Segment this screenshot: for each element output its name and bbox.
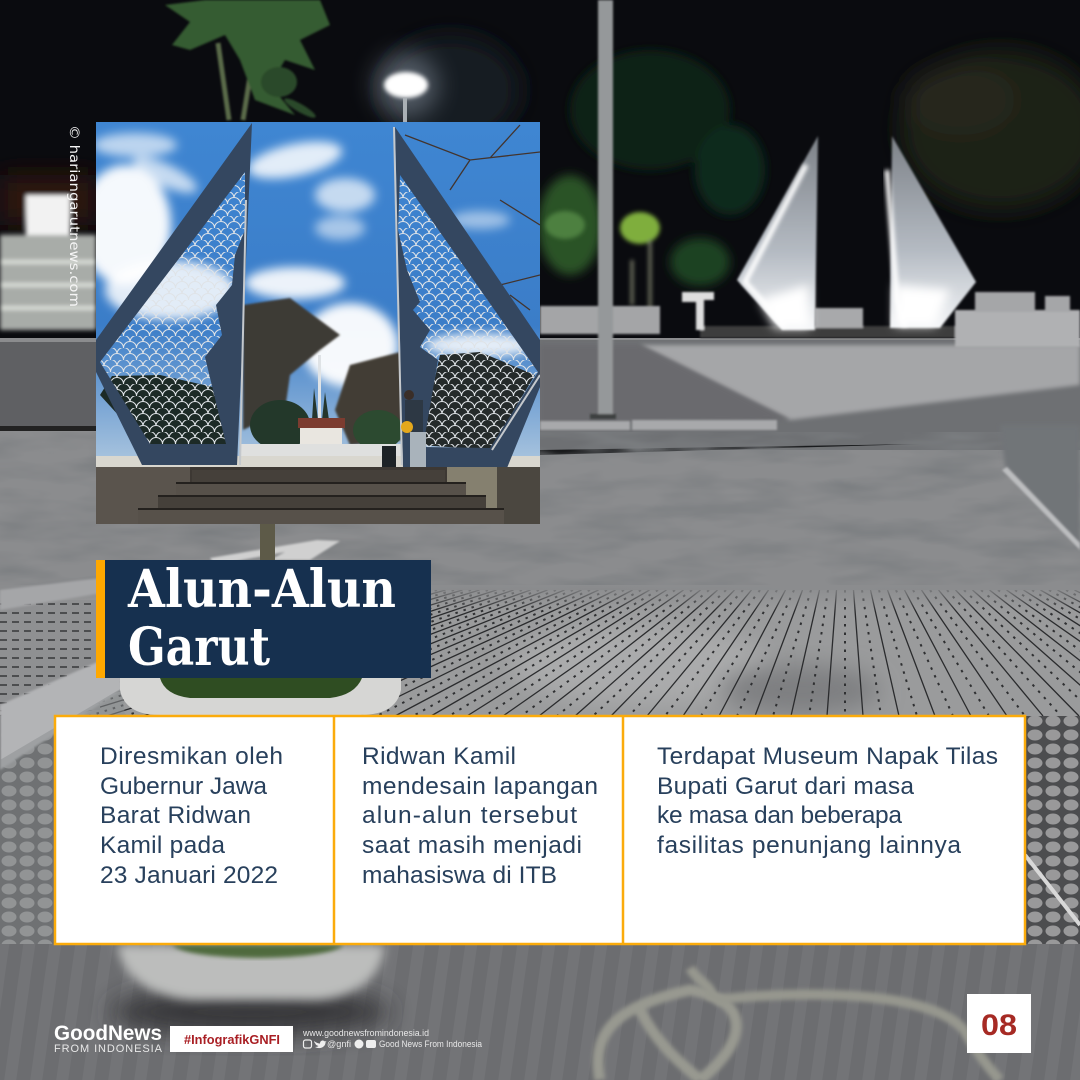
column 3 text: Bupati Garut dari masa	[657, 773, 914, 800]
footer contact details: Good News From Indonesia	[379, 1039, 482, 1049]
column 1 text: Barat Ridwan	[100, 802, 251, 829]
dotted joints in perspective	[0, 590, 1080, 716]
lamp glow	[374, 53, 438, 124]
sky	[96, 122, 540, 462]
silver edges of the frames	[240, 127, 540, 465]
column 1 text: Diresmikan oleh	[100, 743, 283, 770]
blurred bottom strip	[0, 944, 1080, 1080]
trees behind the right mesh	[420, 352, 535, 450]
post under the photo	[260, 524, 275, 564]
clouds	[79, 133, 535, 387]
hashtag badge: #InfografikGNFI	[184, 1032, 280, 1047]
monument sails	[737, 136, 976, 330]
title text: Garut	[128, 617, 270, 678]
hashtag badge	[170, 1026, 293, 1052]
steps and stone base	[96, 467, 540, 524]
street pole	[590, 0, 616, 419]
trees behind the left mesh	[100, 375, 226, 450]
photo credit: © hariangarutnews.com	[66, 125, 82, 307]
plaza ground	[0, 338, 1080, 598]
tree at the top left	[165, 0, 330, 120]
left mesh	[100, 172, 245, 444]
left paving and curb	[0, 578, 125, 945]
icon: instagram	[304, 1040, 312, 1048]
dark trees on the right	[900, 50, 1080, 210]
footer logo	[54, 1022, 163, 1055]
footer logo: FROM INDONESIA	[54, 1043, 163, 1055]
mottled paving texture	[0, 432, 1080, 602]
white cable	[1025, 855, 1080, 925]
right mesh	[398, 175, 538, 448]
column 1 text: Kamil pada	[100, 832, 225, 859]
icon: youtube	[366, 1040, 376, 1048]
title background	[105, 560, 431, 678]
column 2 text: alun-alun tersebut	[362, 802, 577, 829]
white road markings	[210, 540, 340, 565]
column 3 text	[657, 743, 998, 859]
title block	[96, 559, 431, 678]
dark corner and curb on the right	[1000, 425, 1080, 550]
info panel with three columns	[55, 716, 1025, 944]
footer contact details	[302, 1028, 482, 1049]
column 1 text: 23 Januari 2022	[100, 862, 278, 889]
column 3 text: Terdapat Museum Napak Tilas	[657, 743, 998, 770]
footer logo: GoodNews	[54, 1022, 162, 1045]
column 2 text: Ridwan Kamil	[362, 743, 516, 770]
column 2 text: mendesain lapangan	[362, 773, 598, 800]
column 1 text	[100, 743, 283, 889]
low wall behind the plaza	[540, 292, 1080, 347]
tree branches	[405, 125, 540, 310]
page number: 08	[981, 1009, 1017, 1042]
icon: twitter	[314, 1040, 326, 1048]
right frame	[395, 127, 540, 468]
column 2 text	[362, 743, 598, 889]
title text	[127, 559, 396, 678]
column 2 text: saat masih menjadi	[362, 832, 582, 859]
accent bar	[96, 560, 105, 678]
green trees behind the pole	[538, 50, 765, 320]
man with a ball	[382, 390, 426, 470]
title text: Alun-Alun	[127, 559, 396, 620]
ground	[96, 456, 540, 467]
column 2 text: mahasiswa di ITB	[362, 862, 557, 889]
footer contact details: @gnfi	[327, 1039, 351, 1049]
column 3 text: ke masa dan beberapa	[657, 802, 902, 829]
page number	[967, 994, 1031, 1053]
column 1 text: Gubernur Jawa	[100, 773, 267, 800]
dim glow around the lamp	[380, 35, 520, 145]
planter	[120, 678, 401, 715]
background trees and pavilion	[240, 298, 405, 457]
left frame	[96, 123, 252, 465]
footer contact details: www.goodnewsfromindonesia.id	[302, 1028, 429, 1038]
inset photo of the monument by day	[79, 122, 540, 524]
left building	[0, 175, 96, 330]
cobblestone pavement	[0, 585, 1080, 946]
column 3 text: fasilitas penunjang lainnya	[657, 832, 961, 859]
icon: facebook	[354, 1040, 364, 1048]
solid joints in perspective	[0, 590, 1080, 716]
